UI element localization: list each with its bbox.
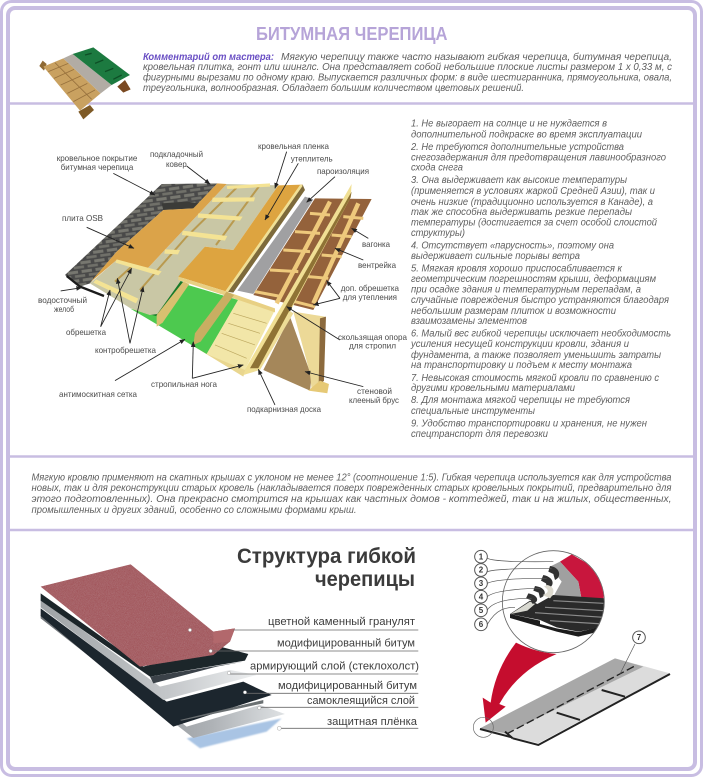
roof diagram labels: вагонка: [362, 239, 390, 249]
advantages list: случайные повреждения быстро устраняются благодаря: [411, 294, 670, 306]
advantages list: 9. Удобство транспортировки и хранения, не нужен: [411, 418, 647, 430]
usage paragraph: новых, так и для реконструкции старых кровель (накладывается поверх поврежденных старых кровельных покрытий, предварительно для: [32, 483, 672, 494]
title: БИТУМНАЯ ЧЕРЕПИЦА: [256, 24, 448, 44]
structure heading: Структура гибкой: [237, 545, 416, 568]
advantages list: выдерживает сильные порывы ветра: [411, 251, 580, 262]
roof diagram labels: антимоскитная сетка: [59, 389, 137, 399]
advantages list: температуры (достигается за счет особой слоистой: [411, 216, 657, 228]
roof diagram labels: обрешетка: [66, 327, 106, 337]
roof diagram labels: для стропил: [349, 340, 396, 350]
advantages list: усиления несущей конструкции кровли, здания и: [410, 339, 629, 350]
intro comment: кровельная плитка, гонт или шинглс. Она представляет собой небольшие плоские листы размером 1 х 0,33 м, с: [143, 61, 672, 73]
intro comment: Мягкую черепицу также часто называют гибкая черепица, битумная черепица,: [281, 51, 672, 63]
shingle strip diagram with magnified corner: [473, 550, 670, 745]
red arrow: [483, 643, 557, 723]
roof diagram labels: стеновой: [357, 386, 392, 396]
number markers: 6: [479, 620, 484, 629]
intro comment: треугольника, волнообразная. Обладает большим количеством цветовых решений.: [143, 82, 524, 94]
layered shingle cross-section: [41, 564, 418, 748]
structure heading: [237, 545, 416, 591]
roof diagram labels: кровельная пленка: [258, 141, 329, 151]
roof diagram labels: клееный брус: [349, 395, 399, 405]
roof diagram labels: ковер: [166, 159, 187, 169]
advantages list: 5. Мягкая кровля хорошо приспосабливается к: [411, 262, 623, 274]
layer labels: защитная плёнка: [327, 716, 418, 728]
material layers: [187, 718, 282, 748]
number markers: 1: [479, 552, 484, 561]
advantages list: небольшим размерам плиток и возможности: [411, 305, 616, 317]
roof diagram labels: для утепления: [343, 292, 397, 302]
roof diagram labels: желоб: [54, 304, 74, 314]
advantages list: взаимозамены элементов: [411, 316, 527, 327]
callout arrows: [61, 152, 368, 405]
advantages list: 1. Не выгорает на солнце и не нуждается в: [411, 118, 607, 130]
advantages list: 3. Она выдерживает как высокие температуры: [411, 175, 628, 186]
advantages list: 2. Не требуются дополнительные устройства: [410, 141, 624, 153]
magnifier: [502, 551, 605, 653]
usage paragraph: этого подготовленных). Она прекрасно смотрится на крышах как частных домов - коттеджей, так и на жилых, общественных,: [32, 493, 672, 505]
shingle strip: [480, 658, 670, 745]
roof diagram labels: утеплитель: [291, 154, 333, 164]
advantages list: на транспортировку и подъем к месту монтажа: [411, 360, 632, 371]
advantages list: [410, 118, 671, 440]
advantages list: структуры): [411, 228, 465, 239]
roof diagram labels: подкарнизная доска: [247, 404, 321, 414]
number markers: 3: [479, 579, 484, 588]
advantages list: очень низкие (традиционно используется в Канаде), а: [411, 197, 653, 208]
roof diagram labels: [38, 141, 407, 414]
layer labels: модифицированный битум: [278, 680, 417, 692]
advantages list: снегозадержания для предотвращения лавинообразного: [411, 152, 666, 164]
advantages list: 4. Отсутствует «парусность», поэтому она: [411, 240, 614, 252]
layer labels: армирующий слой (стеклохолст): [250, 660, 419, 672]
advantages list: (применяется в условиях жаркой Средней Азии), так и: [411, 186, 655, 197]
roof layers: [65, 183, 372, 393]
advantages list: 7. Невысокая стоимость мягкой кровли по сравнению с: [411, 373, 659, 384]
usage paragraph: [32, 472, 672, 516]
structure heading: черепицы: [315, 568, 415, 591]
roof diagram labels: водосточный: [38, 295, 87, 305]
corner ring: [473, 717, 493, 737]
roof diagram labels: скользящая опора: [338, 332, 407, 342]
leader dots: [188, 628, 281, 730]
number markers: 5: [479, 606, 484, 615]
roof diagram labels: стропильная нога: [151, 379, 217, 389]
advantages list: специальные инструменты: [411, 406, 536, 417]
icon: shingle sample: [39, 47, 131, 119]
roof diagram labels: контробрешетка: [95, 345, 156, 355]
layer labels: самоклеящийся слой: [307, 695, 415, 707]
advantages list: другими кровельными материалами: [411, 383, 575, 394]
intro comment: [143, 51, 672, 94]
advantages list: 6. Малый вес гибкой черепицы исключает необходимость: [411, 328, 671, 340]
roof diagram labels: подкладочный: [150, 149, 203, 159]
number markers: 4: [479, 592, 484, 601]
number markers: 2: [479, 566, 484, 575]
roof cutaway diagram: [61, 152, 372, 405]
advantages list: фундамента, а также позволяет уменьшить затраты: [411, 349, 662, 361]
roof diagram labels: битумная черепица: [61, 162, 134, 172]
number markers: 7: [637, 633, 642, 642]
intro comment: фигурными вырезами по одному краю. Выпускается различных форм: в виде шестигранника, прямоугольника, овала,: [143, 72, 672, 84]
roof diagram labels: вентрейка: [358, 260, 396, 270]
number markers: [475, 550, 645, 644]
layer labels: модифицированный битум: [277, 638, 415, 650]
usage paragraph: Мягкую кровлю применяют на скатных крышах с уклоном не менее 12° (соотношение 1:5). Гибкая черепица используется как для устройства: [32, 472, 672, 484]
usage paragraph: промышленных и других зданий, особенно со сложными формами крыш.: [32, 504, 356, 516]
advantages list: дополнительной подкраске во время эксплуатации: [411, 130, 642, 140]
roof diagram labels: кровельное покрытие: [57, 153, 138, 163]
leader lines: [211, 630, 418, 728]
intro comment: Комментарий от мастера:: [143, 52, 274, 63]
leader lines: [487, 558, 635, 674]
roof diagram labels: пароизоляция: [317, 166, 369, 176]
advantages list: геометрическим погрешностям крыши, деформациям: [411, 273, 656, 285]
advantages list: при осадке здания и температурным перепадам, а: [411, 284, 641, 296]
layer labels: цветной каменный гранулят: [268, 616, 415, 628]
advantages list: так же способна выдерживать резкие перепады: [411, 206, 633, 218]
advantages list: схода снега: [411, 162, 463, 174]
roof diagram labels: доп. обрешетка: [341, 283, 399, 293]
advantages list: спецтранспорт для перевозки: [411, 429, 548, 440]
roof diagram labels: плита OSB: [62, 213, 103, 223]
layer labels: [250, 616, 419, 728]
advantages list: 8. Для монтажа мягкой черепицы не требуются: [411, 394, 631, 406]
